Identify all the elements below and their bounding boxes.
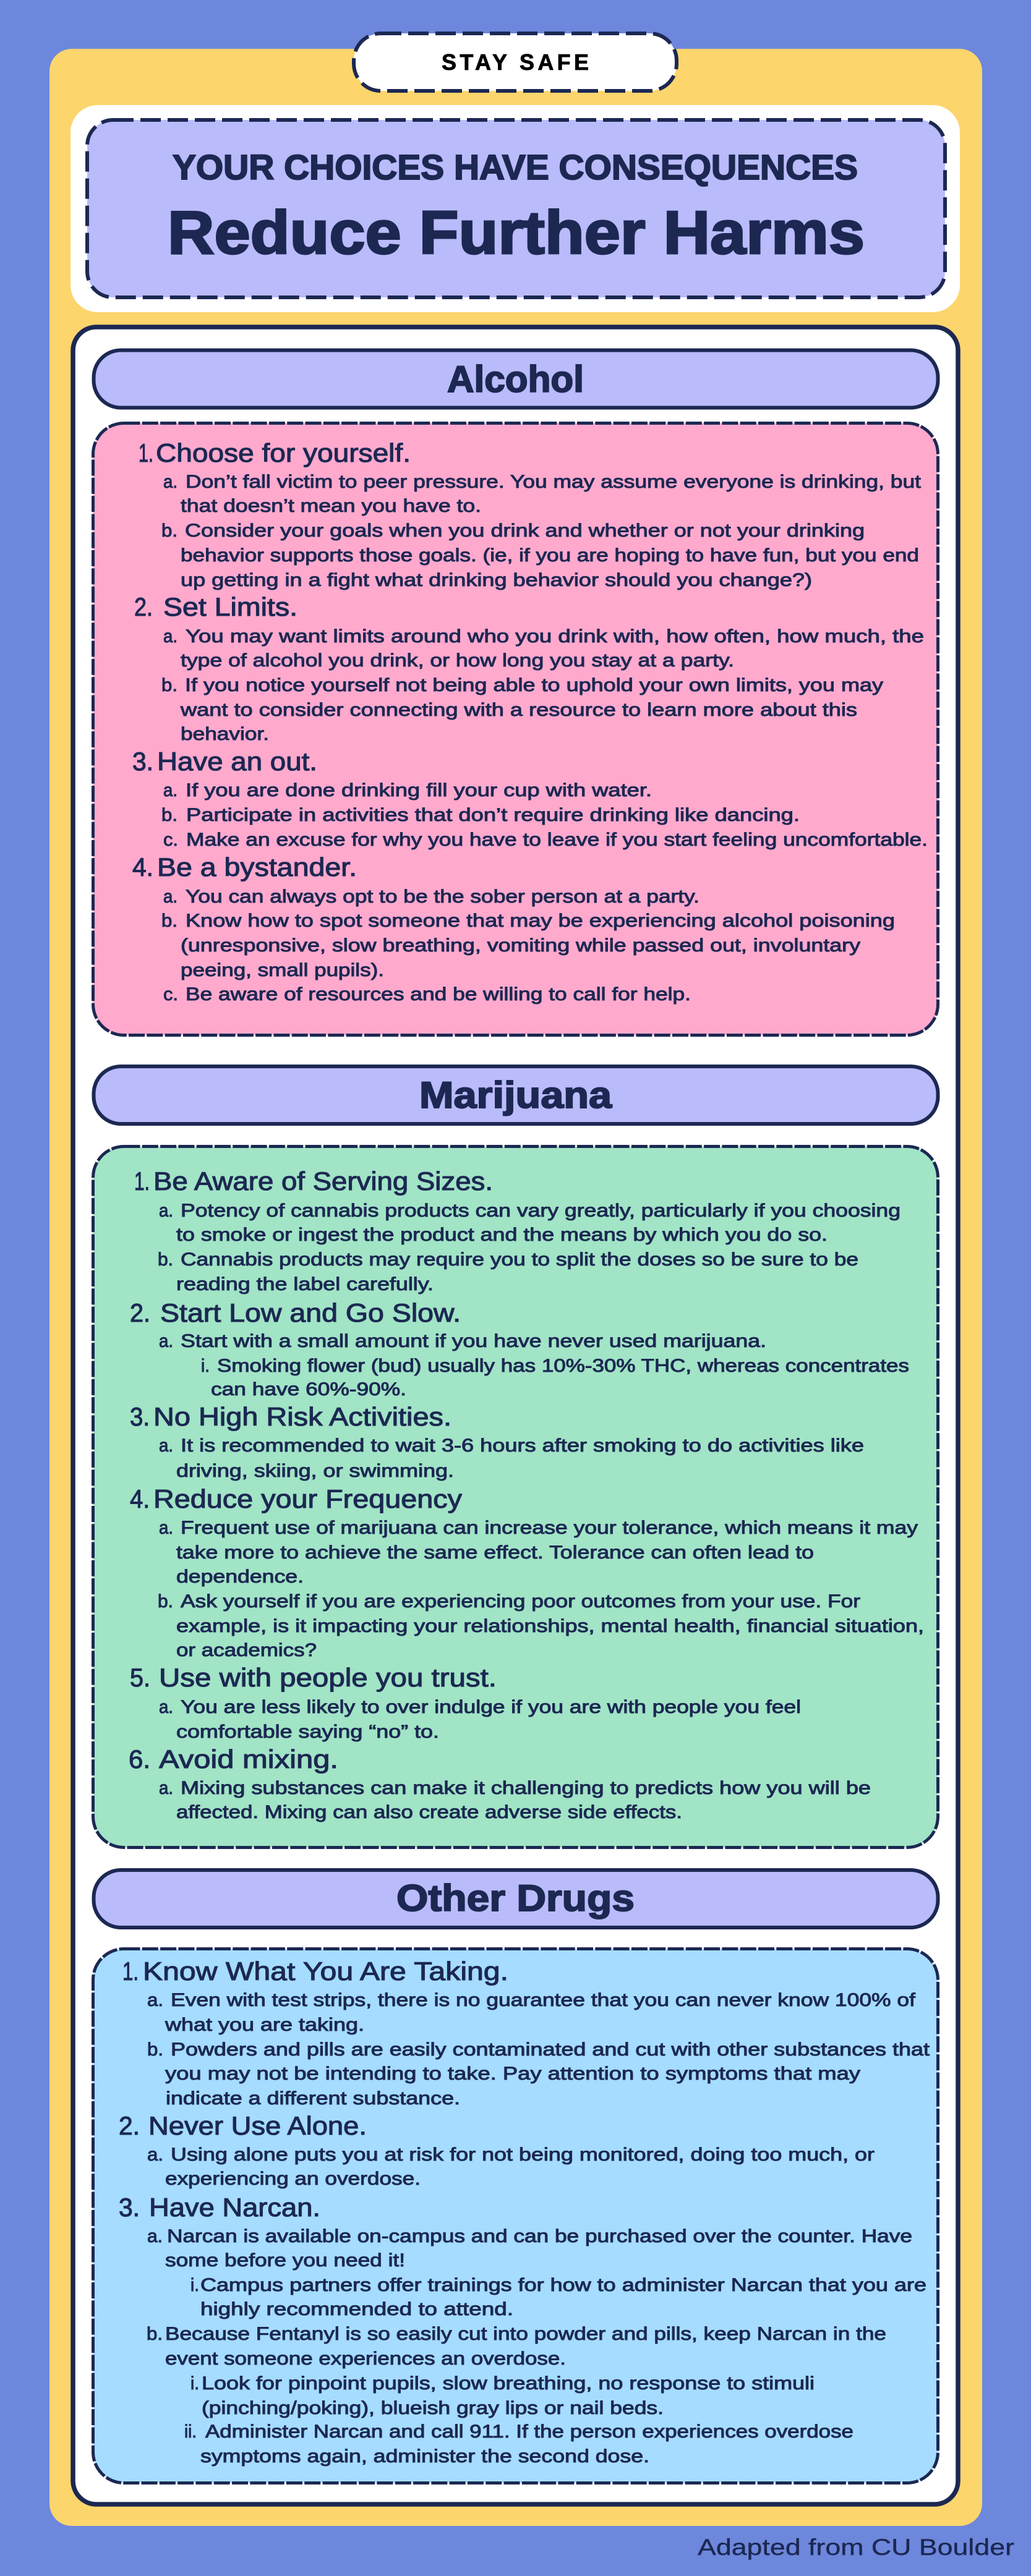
tip 3: no high risk activities: a.: [159, 1435, 173, 1456]
tip 4: be a bystander: Be aware of resources and be willing to call for help.: [186, 984, 691, 1005]
tip 4: be a bystander: b.: [161, 911, 178, 931]
tip 1: be aware of serving sizes: b.: [158, 1249, 173, 1270]
panel: marijuana tips: [93, 1146, 938, 1847]
tip 1: choose for yourself: a.: [163, 472, 178, 492]
tip 3: have an out: Make an excuse for why you have to leave if you start feeling uncomfortable.: [186, 830, 928, 850]
panel: main white content card: [73, 327, 958, 2504]
tip 3: have narcan: event someone experiences an overdose.: [165, 2349, 566, 2369]
tip 1: know what you are taking: you may not be intending to take. Pay attention to symptoms that may: [165, 2064, 860, 2084]
tip 1: know what you are taking: Powders and pills are easily contaminated and cut with other substances that: [171, 2039, 930, 2060]
tip 2: set limits: behavior.: [181, 724, 269, 744]
tip 1: know what you are taking: [122, 1957, 930, 2109]
tip 2: never use alone: Using alone puts you at risk for not being monitored, doing too much, or: [171, 2145, 875, 2165]
tip 4: reduce your frequency: a.: [159, 1518, 173, 1538]
tip 4: be a bystander: peeing, small pupils).: [181, 960, 384, 980]
tip 2: never use alone: Never Use Alone.: [148, 2111, 367, 2140]
tip 5: use with people you trust: [130, 1663, 801, 1742]
tip 2: set limits: a.: [163, 626, 178, 647]
tip 3: have narcan: i.: [190, 2275, 199, 2295]
tip 6: avoid mixing: Avoid mixing.: [159, 1745, 338, 1774]
tip 1: choose for yourself: up getting in a fight what drinking behavior should you change?): [181, 570, 812, 590]
tip 3: have narcan: i.: [190, 2373, 199, 2394]
tip 2: start low and go slow: 2.: [130, 1298, 150, 1327]
tip 3: have narcan: Administer Narcan and call 911. If the person experiences overdose: [205, 2421, 853, 2442]
heading bar: alcohol: [94, 350, 938, 408]
tip 1: choose for yourself: [139, 438, 922, 590]
tip 4: reduce your frequency: Frequent use of marijuana can increase your tolerance, which means it may: [181, 1518, 918, 1538]
tip 3: have narcan: (pinching/poking), blueish gray lips or nail beds.: [202, 2398, 664, 2418]
tip 1: know what you are taking: Know What You Are Taking.: [143, 1957, 508, 1986]
tip 3: have an out: Participate in activities that don’t require drinking like dancing.: [186, 805, 800, 825]
tip 3: have narcan: 3.: [119, 2193, 140, 2222]
tip 2: set limits: type of alcohol you drink, or how long you stay at a party.: [181, 650, 734, 671]
tip 2: set limits: Set Limits.: [163, 592, 297, 621]
tip 1: know what you are taking: a.: [147, 1990, 163, 2010]
tip 3: have an out: a.: [163, 780, 178, 801]
heading bar: alcohol: Alcohol: [447, 359, 584, 400]
tip 3: have narcan: highly recommended to attend.: [200, 2299, 513, 2319]
tip 2: never use alone: experiencing an overdose.: [165, 2169, 421, 2189]
heading bar: other drugs: [94, 1870, 938, 1928]
tip 1: choose for yourself: that doesn’t mean you have to.: [181, 496, 481, 516]
tip 4: be a bystander: Be a bystander.: [157, 852, 357, 882]
heading bar: marijuana: [94, 1066, 938, 1124]
tip 1: be aware of serving sizes: reading the label carefully.: [176, 1274, 434, 1294]
tip 2: set limits: [134, 592, 924, 744]
tip 3: have an out: Have an out.: [157, 747, 317, 776]
tip 3: no high risk activities: driving, skiing, or swimming.: [176, 1461, 454, 1481]
panel: other drugs tips: [93, 1949, 938, 2483]
tip 3: no high risk activities: 3.: [130, 1402, 150, 1431]
tip 4: reduce your frequency: Reduce your Frequency: [153, 1484, 462, 1513]
section: other drugs: [93, 1870, 938, 2483]
tip 3: have an out: c.: [163, 830, 178, 850]
tip 4: be a bystander: Know how to spot someone that may be experiencing alcohol poisoning: [186, 911, 895, 931]
tip 5: use with people you trust: Use with people you trust.: [159, 1663, 497, 1692]
heading: your choices have consequences: YOUR CHOICES HAVE CONSEQUENCES: [173, 148, 858, 187]
tip 3: have narcan: Look for pinpoint pupils, slow breathing, no response to stimuli: [202, 2373, 815, 2394]
tip 3: have narcan: Because Fentanyl is so easily cut into powder and pills, keep Narcan in the: [165, 2324, 886, 2344]
tip 4: reduce your frequency: [130, 1484, 924, 1660]
tip 1: be aware of serving sizes: 1.: [134, 1167, 150, 1196]
tip 2: start low and go slow: Start with a small amount if you have never used marijuana.: [181, 1331, 766, 1351]
tip 2: set limits: 2.: [134, 592, 153, 621]
tip 4: reduce your frequency: 4.: [130, 1484, 150, 1513]
tip 4: reduce your frequency: or academics?: [176, 1640, 317, 1660]
tip 3: have an out: 3.: [132, 747, 153, 776]
section: marijuana: [93, 1066, 938, 1847]
tip 1: choose for yourself: 1.: [139, 438, 153, 467]
tip 3: have narcan: Narcan is available on-campus and can be purchased over the counter. Have: [167, 2226, 912, 2247]
tip 3: have an out: [132, 747, 928, 850]
tip 2: start low and go slow: a.: [159, 1331, 173, 1351]
tip 2: set limits: b.: [161, 675, 178, 695]
tip 2: set limits: You may want limits around who you drink with, how often, how much, the: [186, 626, 924, 647]
tip 3: have narcan: a.: [147, 2226, 163, 2247]
tip 3: no high risk activities: [130, 1402, 864, 1481]
tip 1: be aware of serving sizes: Potency of cannabis products can vary greatly, particularly if you choosing: [181, 1201, 901, 1221]
tip 4: reduce your frequency: take more to achieve the same effect. Tolerance can often lead to: [176, 1542, 814, 1563]
tip 4: be a bystander: [132, 852, 895, 1005]
header panel: [71, 105, 960, 312]
tip 2: never use alone: [119, 2111, 875, 2189]
tip 4: be a bystander: (unresponsive, slow breathing, vomiting while passed out, involuntary: [181, 935, 860, 956]
tip 5: use with people you trust: a.: [159, 1697, 173, 1717]
tip 1: know what you are taking: indicate a different substance.: [166, 2088, 460, 2109]
tip 3: have narcan: Have Narcan.: [149, 2193, 320, 2222]
tip 3: have narcan: some before you need it!: [165, 2250, 405, 2271]
tip 5: use with people you trust: comfortable saying “no” to.: [176, 1722, 439, 1742]
tip 4: reduce your frequency: b.: [158, 1591, 173, 1612]
badge: stay safe: STAY SAFE: [442, 49, 589, 75]
tip 3: have narcan: symptoms again, administer the second dose.: [200, 2446, 649, 2467]
credit: adapted from cu boulder: Adapted from CU Boulder: [698, 2535, 1014, 2560]
tip 3: have narcan: Campus partners offer trainings for how to administer Narcan that you are: [200, 2275, 926, 2295]
tip 1: know what you are taking: what you are taking.: [165, 2015, 364, 2035]
tip 2: never use alone: a.: [147, 2145, 163, 2165]
tip 3: have an out: b.: [161, 805, 178, 825]
tip 4: be a bystander: You can always opt to be the sober person at a party.: [186, 886, 699, 907]
tip 6: avoid mixing: a.: [159, 1778, 173, 1798]
tip 1: choose for yourself: behavior supports those goals. (ie, if you are hoping to have fun, but you end: [181, 545, 919, 566]
panel: alcohol tips: [93, 423, 938, 1035]
tip 2: start low and go slow: Start Low and Go Slow.: [160, 1298, 461, 1327]
tip 6: avoid mixing: 6.: [129, 1745, 150, 1774]
tip 6: avoid mixing: Mixing substances can make it challenging to predicts how you will be: [181, 1778, 871, 1798]
tip 2: start low and go slow: i.: [201, 1356, 210, 1376]
tip 1: choose for yourself: Consider your goals when you drink and whether or not your drinking: [185, 521, 865, 541]
badge: stay safe: [354, 33, 677, 91]
tip 4: be a bystander: c.: [163, 984, 178, 1005]
tip 1: be aware of serving sizes: [134, 1167, 901, 1294]
tip 5: use with people you trust: 5.: [130, 1663, 150, 1692]
tip 6: avoid mixing: affected. Mixing can also create adverse side effects.: [176, 1802, 682, 1822]
tip 1: choose for yourself: b.: [161, 521, 178, 541]
tip 1: know what you are taking: Even with test strips, there is no guarantee that you can never know 100% of: [171, 1990, 916, 2010]
tip 4: be a bystander: a.: [163, 886, 178, 907]
tip 1: be aware of serving sizes: Cannabis products may require you to split the doses so be sure to be: [181, 1249, 858, 1270]
tip 2: start low and go slow: Smoking flower (bud) usually has 10%-30% THC, whereas concentrates: [217, 1356, 909, 1376]
tip 1: be aware of serving sizes: a.: [159, 1201, 173, 1221]
tip 1: be aware of serving sizes: Be Aware of Serving Sizes.: [153, 1167, 493, 1196]
tip 1: choose for yourself: Don’t fall victim to peer pressure. You may assume everyone is drinking, but: [186, 472, 922, 492]
tip 4: reduce your frequency: dependence.: [176, 1566, 304, 1587]
tip 2: set limits: want to consider connecting with a resource to learn more about this: [180, 700, 857, 720]
tip 5: use with people you trust: You are less likely to over indulge if you are with people you feel: [181, 1697, 801, 1717]
tip 3: no high risk activities: No High Risk Activities.: [153, 1402, 451, 1431]
tip 3: have narcan: [119, 2193, 926, 2467]
tip 1: know what you are taking: b.: [147, 2039, 163, 2060]
tip 3: have narcan: b.: [147, 2324, 163, 2344]
tip 4: reduce your frequency: example, is it impacting your relationships, mental health, financial situation,: [176, 1616, 924, 1636]
tip 2: never use alone: 2.: [119, 2111, 140, 2140]
tip 3: have an out: If you are done drinking fill your cup with water.: [186, 780, 652, 801]
title: reduce further harms: Reduce Further Harms: [168, 198, 865, 266]
section: alcohol: [93, 350, 938, 1035]
tip 2: start low and go slow: [130, 1298, 909, 1400]
heading bar: other drugs: Other Drugs: [396, 1877, 635, 1919]
tip 4: reduce your frequency: Ask yourself if you are experiencing poor outcomes from your use. For: [181, 1591, 860, 1612]
tip 1: choose for yourself: Choose for yourself.: [156, 438, 411, 467]
heading bar: marijuana: Marijuana: [419, 1074, 612, 1116]
tip 1: know what you are taking: 1.: [122, 1957, 139, 1986]
tip 6: avoid mixing: [129, 1745, 871, 1822]
tip 1: be aware of serving sizes: to smoke or ingest the product and the means by which you do so.: [176, 1225, 828, 1245]
tip 2: set limits: If you notice yourself not being able to uphold your own limits, you may: [185, 675, 883, 695]
tip 3: no high risk activities: It is recommended to wait 3-6 hours after smoking to do activities like: [181, 1435, 864, 1456]
tip 2: start low and go slow: can have 60%-90%.: [211, 1379, 406, 1400]
tip 3: have narcan: ii.: [184, 2421, 197, 2442]
tip 4: be a bystander: 4.: [132, 852, 153, 882]
